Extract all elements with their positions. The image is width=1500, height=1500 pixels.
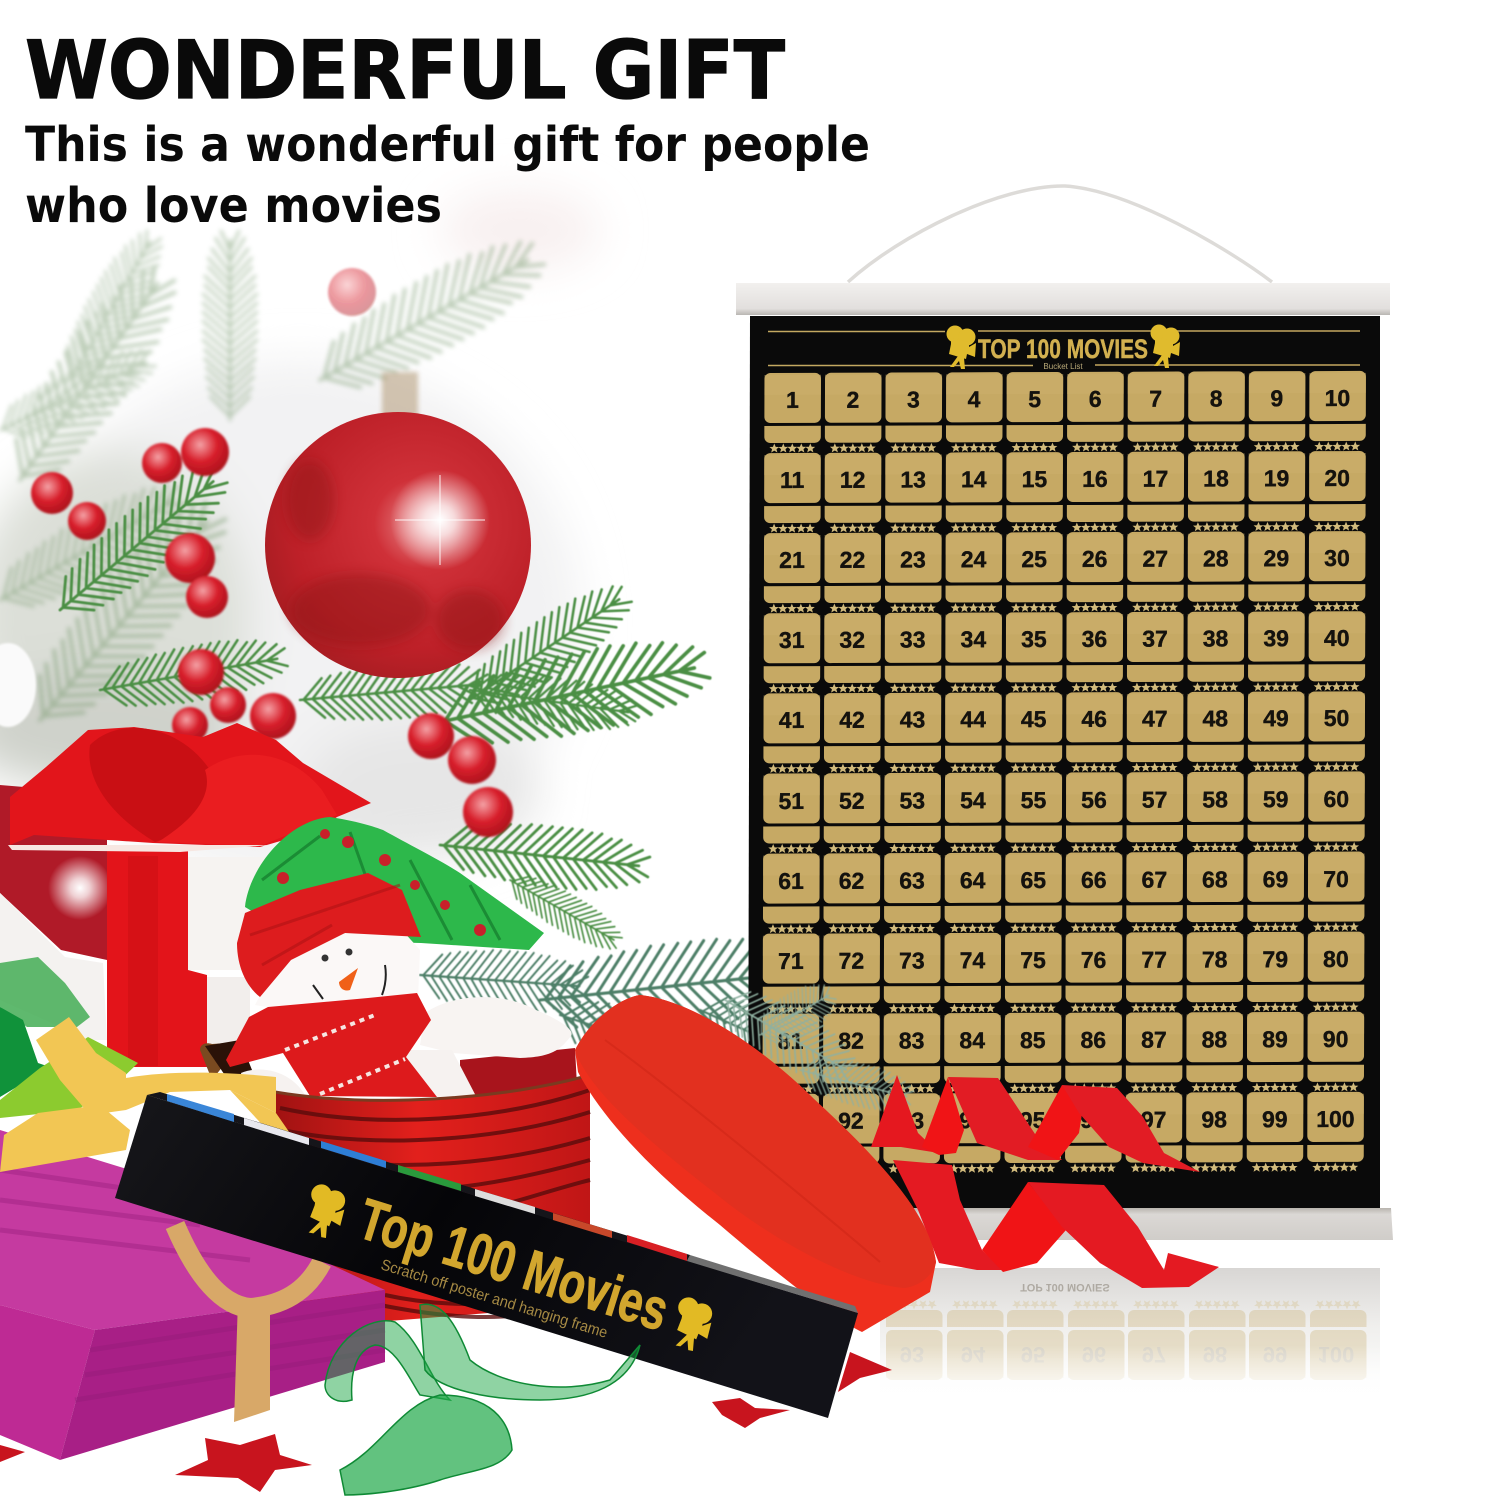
ticket numbers: 32 [839,627,865,653]
green dark fold [0,1007,50,1097]
snowman green hat [245,817,544,950]
ticket numbers: 80 [1323,946,1349,972]
poster title: TOP 100 MOVIES [978,334,1148,364]
ticket numbers: 99 [1262,1106,1288,1132]
ticket numbers: 95 [1020,1107,1046,1133]
ticket numbers: 76 [1081,947,1106,973]
white box lower [200,977,250,1045]
ticket numbers: 57 [1142,787,1167,813]
ticket numbers: 92 [838,1108,864,1134]
camera icon left [946,326,976,369]
reflected numbers [900,1342,1354,1367]
red knit hat band [237,873,421,997]
scarf [226,993,437,1097]
ticket numbers: 88 [1202,1026,1227,1052]
ticket numbers: 82 [838,1028,864,1054]
ticket numbers: 31 [779,627,805,653]
ticket numbers: 83 [899,1027,924,1054]
ticket numbers: 13 [900,466,926,493]
ticket numbers: 100 [1316,1106,1355,1132]
ticket numbers: 69 [1263,866,1288,892]
ticket numbers: 77 [1141,947,1167,973]
heading [25,24,870,234]
ticket numbers: 37 [1142,626,1168,652]
eyes and nose [313,948,386,999]
ticket numbers: 8 [1210,385,1223,411]
ticket numbers: 21 [779,547,805,573]
upper ribbon [871,1075,1200,1172]
cylindrical gift tin [275,1075,590,1330]
ticket numbers: 22 [840,547,865,573]
ticket numbers: 18 [1203,465,1229,491]
ticket numbers: 2 [846,387,859,413]
subtitle line two: who love movies [25,178,442,234]
ticket numbers: 63 [899,867,925,894]
pine sprig behind snowman [418,930,911,1134]
poster floor reflection [880,1268,1385,1400]
white snow ball at the left edge [0,643,36,727]
reflected numbers: 99 [1263,1342,1287,1367]
ticket numbers: 59 [1263,786,1289,812]
camera icon right [1150,324,1180,368]
reflected numbers: 94 [961,1342,986,1367]
main title: WONDERFUL GIFT [25,24,785,117]
ticket numbers: 93 [899,1107,924,1134]
ticket numbers: 17 [1143,466,1168,492]
blurred pine branches [0,223,556,745]
ticket numbers: 72 [839,948,864,974]
ticket numbers: 79 [1262,946,1288,972]
face [255,930,420,1020]
ticket numbers: 64 [960,867,986,893]
tan ribbon on pink box [234,1298,270,1422]
box title: Top 100 Movies [351,1186,676,1344]
red vertical ribbon [107,850,207,1067]
ticket numbers: 40 [1324,625,1350,651]
reflected numbers: 100 [1318,1342,1354,1367]
box icon left [304,1183,348,1240]
scattered red star confetti [0,1352,892,1492]
reflected poster title: TOP 100 MOVIES [1020,1281,1110,1293]
ticket numbers: 71 [778,948,804,974]
box icon right [671,1296,715,1353]
arm and body [420,997,572,1058]
yellow bow [0,1017,312,1172]
ticket numbers: 38 [1203,625,1229,651]
box subtitle: Scratch off poster and hanging frame [379,1257,609,1342]
lower ribbon [893,1160,1219,1288]
poster with hanging frame [736,186,1393,1240]
pink top face [0,1130,385,1330]
ticket numbers: 42 [839,707,865,733]
ticket numbers: 53 [899,787,925,814]
ticket numbers: 84 [959,1027,985,1053]
ticket numbers: 62 [839,868,864,894]
red berries [31,268,513,837]
ticket numbers: 97 [1141,1107,1167,1133]
ticket numbers [778,385,1357,1134]
ticket numbers: 90 [1323,1026,1348,1052]
dark top edge [147,1092,690,1261]
ticket numbers: 87 [1141,1027,1167,1053]
ticket numbers: 23 [900,546,926,573]
ticket numbers: 33 [900,626,926,653]
ticket numbers: 41 [779,707,805,733]
red ornament ball [265,372,531,678]
pine branches behind the ornament [41,452,715,959]
pink front left face [0,1305,95,1460]
ticket numbers: 78 [1202,946,1228,972]
ticket numbers: 81 [778,1028,804,1054]
ticket numbers: 28 [1203,545,1229,571]
ticket numbers: 44 [960,706,986,732]
red satin bow [10,723,371,847]
white box upper [188,857,268,970]
ticket numbers: 47 [1142,706,1168,732]
ticket numbers: 51 [778,788,804,814]
ticket numbers: 11 [780,467,805,493]
ticket numbers: 70 [1323,866,1349,892]
hat berries [277,829,486,936]
ticket numbers: 30 [1324,545,1350,571]
ticket numbers: 48 [1202,705,1228,731]
ticket numbers: 68 [1202,866,1228,892]
ticket numbers: 34 [961,626,986,652]
ticket numbers: 9 [1270,385,1283,411]
lime green box [0,1037,138,1118]
ticket numbers: 20 [1324,465,1350,491]
ticket numbers: 43 [900,706,925,733]
reflected numbers: 93 [900,1342,924,1367]
poster header [768,324,1360,371]
ticket numbers: 52 [839,788,865,814]
reflected numbers: 98 [1203,1342,1227,1367]
ticket numbers: 75 [1020,947,1046,973]
ticket numbers: 27 [1142,546,1168,572]
lower green ribbon [325,1304,640,1495]
ticket numbers: 29 [1264,545,1289,571]
black product box [115,1092,858,1418]
ticket numbers: 3 [907,386,920,413]
top hanger [736,283,1390,315]
poster subtitle: Bucket List [1043,362,1083,371]
white paper corner [0,893,107,1040]
black poster sheet [748,316,1380,1209]
reflected numbers: 97 [1142,1342,1166,1367]
snowy blurred backdrop [0,190,600,880]
red round box lid [575,995,936,1332]
ticket numbers: 4 [968,386,981,412]
ticket numbers: 67 [1142,867,1167,893]
ticket numbers: 55 [1021,787,1047,813]
ticket numbers: 61 [778,868,804,894]
film strip on top edge [167,1094,687,1261]
ticket numbers: 7 [1149,386,1162,412]
ticket numbers: 12 [840,467,866,493]
ticket numbers: 10 [1325,385,1350,411]
ticket numbers: 66 [1081,867,1107,893]
pink gift box [0,1130,385,1460]
ticket numbers: 58 [1202,786,1228,812]
ticket numbers: 5 [1028,386,1041,412]
ticket numbers: 6 [1089,386,1102,412]
green and yellow ribbons [0,957,312,1172]
ticket numbers: 85 [1020,1027,1046,1053]
ticket numbers: 19 [1264,465,1289,491]
ticket numbers: 16 [1082,466,1108,492]
ticket numbers: 86 [1080,1027,1106,1053]
ticket numbers: 46 [1081,706,1107,732]
ticket numbers: 15 [1022,466,1047,492]
ticket numbers: 96 [1080,1107,1106,1133]
tin interior and rim [200,1040,578,1105]
grey top edge [687,1255,858,1313]
ticket numbers: 24 [961,546,987,572]
scratch-off ticket grid [762,371,1366,1174]
ticket numbers: 89 [1262,1026,1288,1052]
ticket numbers: 74 [960,947,985,973]
ticket numbers: 73 [899,947,925,974]
curled red ribbons [871,1075,1219,1288]
ticket numbers: 60 [1323,786,1349,812]
ticket numbers: 14 [961,466,987,492]
ticket numbers: 35 [1021,626,1047,652]
ticket numbers: 1 [786,387,799,413]
ticket numbers: 65 [1020,867,1046,893]
ticket numbers: 39 [1263,625,1289,651]
ticket numbers: 50 [1324,705,1349,731]
snowman toy [226,817,572,1100]
ticket numbers: 36 [1082,626,1107,652]
ticket numbers: 25 [1021,546,1047,572]
gift with red bow [0,723,371,1067]
ticket numbers: 91 [778,1108,803,1134]
ticket numbers: 26 [1082,546,1108,572]
ticket numbers: 54 [960,787,986,813]
bottom hanger [748,1208,1393,1240]
shiny red ball behind gift [0,785,107,960]
ticket numbers: 98 [1201,1106,1227,1132]
subtitle line one: This is a wonderful gift for people [25,117,870,173]
ticket numbers: 94 [959,1107,985,1133]
foreground pine sprig over poster [712,975,917,1118]
reflected numbers: 95 [1021,1342,1045,1367]
reflected numbers: 96 [1082,1342,1106,1367]
ticket numbers: 49 [1263,705,1289,731]
hanging cord [848,186,1272,282]
ticket numbers: 45 [1021,706,1047,732]
pink front right face [60,1290,385,1460]
ticket numbers: 56 [1081,787,1107,813]
green organza loop [0,957,90,1027]
